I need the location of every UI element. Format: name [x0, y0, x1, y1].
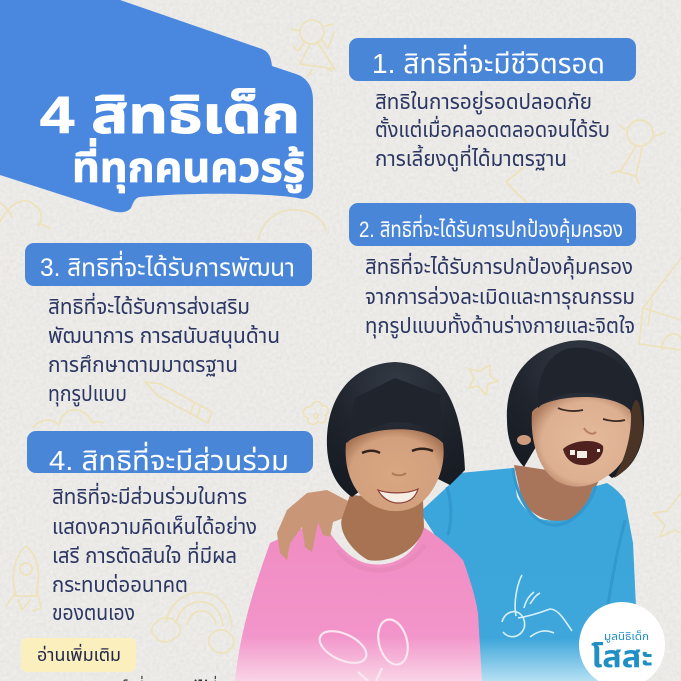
text block 4: กระทบต่ออนาคต	[52, 573, 188, 597]
text block 3: ทุกรูปแบบ	[48, 383, 127, 407]
title line 2: ที่ทุกคนควรรู้	[72, 138, 305, 193]
panel: right 2	[349, 203, 636, 339]
doodle: house	[639, 258, 681, 350]
heading 3: 3. สิทธิที่จะได้รับการพัฒนา	[40, 250, 295, 282]
text block 1: สิทธิในการอยู่รอดปลอดภัย	[375, 90, 592, 115]
heading bar 3	[25, 243, 312, 286]
boy ear	[517, 435, 531, 445]
heading 4: 4. สิทธิที่จะมีส่วนร่วม	[49, 441, 289, 476]
rabbit logo on boy shirt	[502, 575, 572, 637]
text block 4: เสรี การตัดสินใจ ที่มีผล	[52, 541, 237, 568]
text block 3	[48, 292, 280, 407]
doodle: star right	[653, 493, 681, 537]
boy blue shirt	[420, 468, 640, 681]
heading 2: 2. สิทธิที่จะได้รับการปกป้องคุ้มครอง	[359, 214, 623, 243]
doodle: cloud middle	[33, 410, 103, 427]
photo: two children	[235, 340, 644, 681]
doodle: girl top right	[291, 20, 335, 76]
doodle: cloud left	[0, 201, 50, 229]
girl collar	[338, 545, 425, 570]
read more button	[21, 638, 136, 672]
doodle: arrow	[506, 167, 526, 202]
doodle: pencil	[145, 382, 212, 423]
boy hair back	[507, 340, 644, 478]
heading bar 1	[349, 38, 636, 81]
doodle: boy right	[612, 120, 665, 184]
girl fringe	[347, 378, 443, 443]
girl pink shirt	[235, 520, 482, 681]
text block 4: ของตนเอง	[52, 602, 135, 625]
doodle: rainbow	[152, 592, 234, 653]
boy eyes	[558, 408, 625, 421]
logo: foundation badge: มูลนิธิเด็ก	[604, 631, 649, 643]
text block 4	[52, 482, 257, 625]
text block 3: พัฒนาการ การสนับสนุนด้าน	[48, 324, 280, 349]
doodle: star centre	[469, 365, 498, 395]
boy brown hair ends	[614, 400, 643, 478]
heading bar 2	[349, 203, 636, 246]
doodle: cloud centre	[258, 210, 326, 240]
logo: foundation badge: โสสะ	[591, 641, 653, 674]
hand on shoulder	[277, 490, 352, 560]
boy teeth	[570, 449, 600, 458]
text block 1	[375, 90, 610, 172]
text block 4: แสดงความคิดเห็นได้อย่าง	[52, 514, 257, 539]
girl face	[346, 429, 444, 511]
text block 2: จากการล่วงละเมิดและทารุณกรรม	[365, 285, 635, 310]
title line 1: 4 สิทธิเด็ก	[40, 87, 300, 145]
panel: right 1	[349, 38, 636, 172]
girl nose	[392, 473, 406, 475]
title banner	[0, 0, 313, 212]
logo: foundation badge	[579, 602, 665, 681]
boy fringe strands	[538, 348, 632, 411]
text block 2	[365, 252, 635, 339]
text block 1: การเลี้ยงดูที่ได้มาตรฐาน	[375, 144, 567, 172]
rabbit logo on girl shirt	[315, 616, 412, 681]
girl	[235, 362, 482, 681]
girl eyes	[362, 449, 433, 453]
boy face	[532, 397, 632, 487]
panel: left 4	[27, 431, 313, 625]
doodle: flower	[304, 402, 328, 424]
doodle: rocket	[6, 546, 41, 611]
text block 3: สิทธิที่จะได้รับการส่งเสริม	[48, 292, 250, 319]
heading 1: 1. สิทธิที่จะมีชีวิตรอด	[372, 44, 605, 79]
text block 1: ตั้งแต่เมื่อคลอดตลอดจนได้รับ	[375, 115, 610, 142]
text block 3: การศึกษาตามมาตรฐาน	[48, 354, 238, 377]
text block 2: ทุกรูปแบบทั้งด้านร่างกายและจิตใจ	[365, 312, 635, 339]
girl mouth	[378, 489, 418, 503]
girl hair back	[327, 362, 465, 497]
text block 4: สิทธิที่จะมีส่วนร่วมในการ	[52, 482, 247, 509]
boy neck	[514, 465, 600, 521]
text block 2: สิทธิที่จะได้รับการปกป้องคุ้มครอง	[365, 252, 633, 280]
boy mouth	[563, 441, 603, 465]
panel: left 3	[25, 243, 312, 407]
read more button: อ่านเพิ่มเติม	[37, 643, 121, 665]
boy	[420, 340, 644, 681]
boy shirt collar and shadows	[447, 468, 625, 625]
boy nose	[584, 428, 596, 434]
heading bar 4	[27, 431, 313, 473]
girl neck	[341, 495, 424, 561]
